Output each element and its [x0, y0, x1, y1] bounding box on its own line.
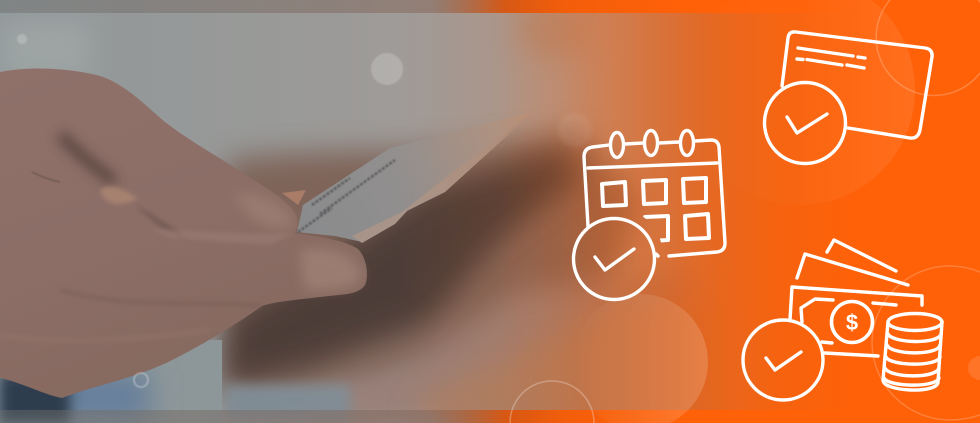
blurred sleeve and table, lower left	[0, 340, 222, 423]
icon: cash and coins with check	[743, 240, 942, 400]
bottom band	[0, 410, 980, 423]
icon: credit card with check	[764, 32, 932, 164]
blurred warm wall, upper right	[515, 4, 595, 56]
coin stack	[883, 314, 942, 390]
credit card in hand	[282, 112, 533, 243]
dollar medallion	[832, 302, 872, 342]
top band	[0, 0, 980, 13]
blurred surface below card	[225, 130, 640, 400]
icon: calendar with check	[574, 130, 725, 300]
dollar medallion: $	[846, 310, 858, 335]
hand holding card	[0, 69, 367, 398]
